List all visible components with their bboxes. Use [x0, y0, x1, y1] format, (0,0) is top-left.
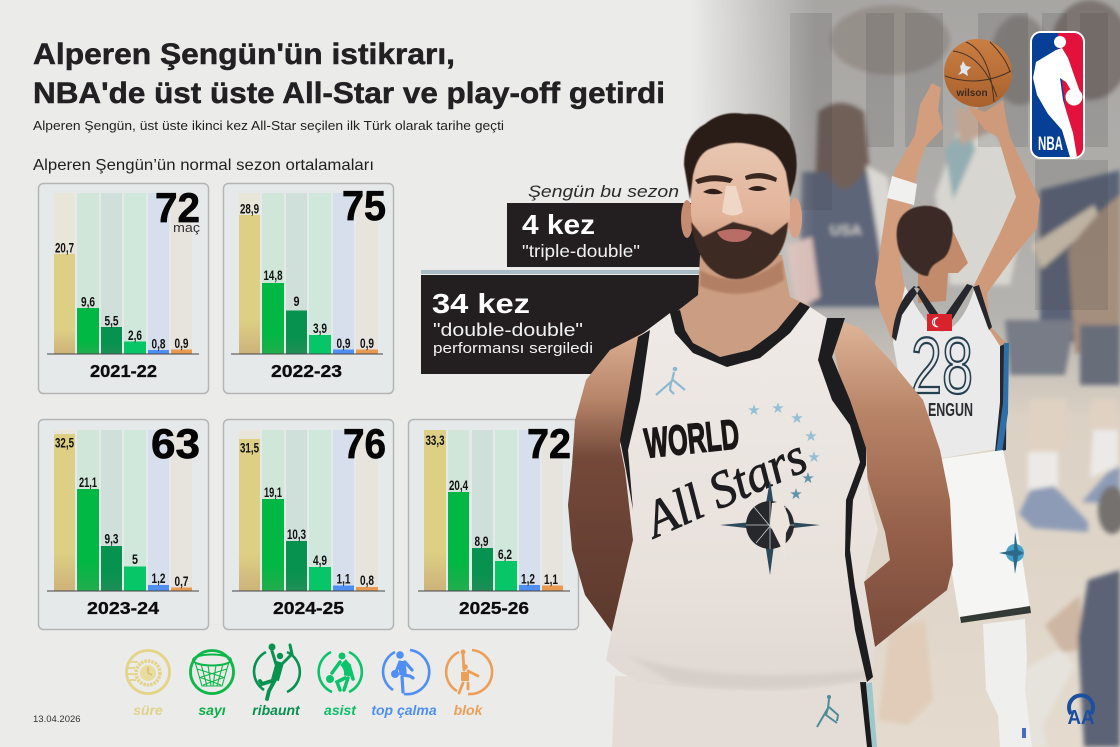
panel: 2025-26	[408, 420, 578, 630]
hair	[684, 113, 797, 200]
date: 13.04.2026	[33, 714, 81, 725]
background photo: players on court: USA	[830, 222, 862, 239]
stars	[747, 400, 821, 503]
bar tracks	[54, 430, 192, 591]
right arm	[827, 318, 953, 647]
season: 2022-23	[271, 361, 342, 381]
ghost letters	[790, 13, 1108, 310]
nose	[722, 186, 743, 216]
title: NBA'de üst üste All-Star ve play-off getirdi	[33, 77, 665, 110]
All Stars script: All Stars	[634, 428, 815, 550]
panel: 2022-23	[224, 182, 394, 394]
callout: double-double: 34 kez	[432, 288, 530, 319]
values: 33,3	[426, 433, 445, 448]
emblem	[720, 480, 820, 575]
bars	[54, 434, 192, 591]
games played: 72	[527, 420, 571, 467]
values: 0,9	[174, 336, 188, 351]
callout: double-double: "double-double"	[433, 320, 583, 340]
callout: season intro: Şengün bu sezon	[528, 182, 679, 201]
values: 2,6	[128, 328, 142, 343]
season: 2025-26	[459, 598, 529, 618]
games played: 76	[343, 420, 386, 467]
head	[681, 113, 802, 279]
wristband	[887, 176, 917, 205]
values: 9	[294, 294, 300, 309]
bar tracks	[239, 430, 378, 591]
title	[33, 38, 665, 110]
AA logo: AA	[1068, 707, 1094, 729]
jersey logo	[656, 368, 685, 395]
background player in number 28 jersey	[875, 39, 1040, 747]
faded USA jersey	[800, 172, 890, 307]
values: 3,9	[313, 321, 327, 336]
legend: süre	[126, 650, 170, 718]
shorts emblem	[999, 532, 1024, 574]
panel: 2021-22	[38, 184, 208, 394]
bar tracks	[239, 193, 378, 354]
values: 32,5	[55, 436, 74, 450]
ears	[681, 200, 693, 238]
basketball	[944, 39, 1012, 107]
legend: ribaunt: ribaunt	[252, 702, 301, 718]
stars: ★	[771, 400, 785, 417]
values: 1,1	[544, 572, 558, 587]
values: 20,7	[55, 240, 74, 256]
left armhole band	[620, 330, 650, 510]
brows	[695, 173, 777, 184]
legend: ribaunt	[252, 644, 301, 718]
bar tracks	[54, 193, 192, 354]
panel: 2024-25	[224, 420, 394, 630]
season: 2023-24	[87, 598, 159, 618]
background photo: players on court	[704, 0, 1120, 747]
NBA wordmark: NBA	[1038, 134, 1063, 155]
bar tracks	[424, 430, 563, 591]
stars: ★	[804, 428, 818, 445]
values	[55, 436, 188, 589]
eyes	[703, 186, 767, 194]
callout: triple-double	[507, 203, 703, 267]
faded white jersey behind	[934, 132, 1018, 286]
bars	[54, 254, 192, 354]
main player	[568, 113, 953, 747]
games played: 75	[342, 182, 386, 229]
callout: triple-double: 4 kez	[522, 209, 595, 240]
legend: asist: asist	[324, 702, 357, 718]
values	[426, 433, 558, 587]
stars: ★	[747, 402, 761, 419]
values	[240, 440, 374, 588]
NBA logo	[1030, 31, 1085, 159]
values: 28,9	[240, 202, 259, 216]
legend	[126, 644, 492, 718]
stars: ★	[789, 486, 803, 503]
left raised arm	[875, 83, 943, 340]
games played: maç	[173, 221, 200, 235]
face	[691, 139, 790, 278]
jersey name: ENGUN	[928, 400, 973, 420]
games played: 72	[155, 184, 200, 231]
bars	[239, 215, 378, 354]
values: 9,6	[81, 294, 95, 310]
stars: ★	[807, 449, 821, 466]
neck	[676, 255, 810, 368]
AA logo	[1068, 695, 1094, 729]
legend: top çalma	[371, 650, 437, 718]
callout: triple-double: "triple-double"	[522, 241, 640, 261]
mouth	[717, 229, 752, 242]
values: 0,9	[360, 336, 374, 351]
values: 9,3	[104, 532, 119, 546]
bars	[239, 439, 378, 591]
values: 0,7	[174, 574, 188, 589]
season: 2021-22	[90, 361, 157, 381]
season: 2024-25	[273, 598, 344, 618]
legend: sayı: sayı	[198, 702, 226, 718]
jersey number: 28	[911, 321, 973, 410]
shorts	[612, 676, 877, 747]
divider strip	[421, 270, 703, 274]
values: 20,4	[449, 478, 468, 493]
values: 1,2	[152, 571, 166, 586]
back jersey	[893, 286, 1007, 458]
values: 0,9	[336, 336, 350, 351]
right armhole band and side piping	[818, 318, 873, 682]
values	[55, 240, 188, 352]
basketball: wilson	[955, 88, 988, 99]
values: 6,2	[498, 547, 512, 562]
faded teammate head	[816, 103, 870, 192]
legend: süre: süre	[133, 702, 163, 718]
panel: 2023-24	[38, 420, 208, 630]
values: 5	[132, 552, 138, 567]
stars: ★	[801, 470, 815, 487]
faded shoes	[1019, 486, 1088, 532]
values: 10,3	[287, 527, 306, 542]
callout: double-double: performansı sergiledi	[433, 340, 593, 357]
values: 0,8	[360, 573, 374, 588]
Turkish flag: ☾	[931, 315, 943, 330]
socks	[983, 619, 1032, 747]
right raised arm	[960, 100, 1040, 345]
values: 14,8	[264, 268, 283, 283]
collar	[670, 302, 810, 367]
values: 31,5	[240, 440, 259, 456]
values: 0,8	[152, 336, 166, 352]
head from behind	[918, 205, 968, 303]
Turkish flag	[927, 314, 952, 331]
left arm	[568, 332, 655, 632]
title: Alperen Şengün'ün istikrarı,	[33, 38, 455, 71]
WORLD wordmark: WORLD	[642, 410, 741, 467]
values	[240, 202, 374, 351]
values: 1,2	[521, 572, 535, 586]
section heading: Alperen Şengün’ün normal sezon ortalamaları	[33, 157, 374, 174]
beard	[691, 222, 788, 279]
games played: 63	[151, 420, 200, 467]
subtitle: Alperen Şengün, üst üste ikinci kez All-Star seçilen ilk Türk olarak tarihe geçti	[33, 118, 504, 133]
bars	[424, 430, 563, 591]
values: 21,1	[79, 475, 97, 490]
white shorts	[925, 450, 1030, 622]
legend: top çalma: top çalma	[371, 702, 437, 718]
legend: sayı	[190, 650, 234, 718]
legend: blok	[446, 650, 492, 718]
white jersey	[606, 302, 878, 691]
faded player bottom right	[1078, 570, 1120, 747]
callout: double-double	[421, 275, 703, 374]
legend: blok: blok	[454, 702, 484, 718]
values: 5,5	[104, 314, 119, 328]
values: 4,9	[313, 553, 327, 568]
values: 19,1	[264, 485, 282, 500]
values: 1,1	[336, 572, 351, 586]
stars: ★	[790, 410, 804, 427]
legend: asist	[319, 652, 362, 718]
jordan logo on shorts	[817, 696, 838, 727]
values: 8,9	[474, 534, 488, 549]
